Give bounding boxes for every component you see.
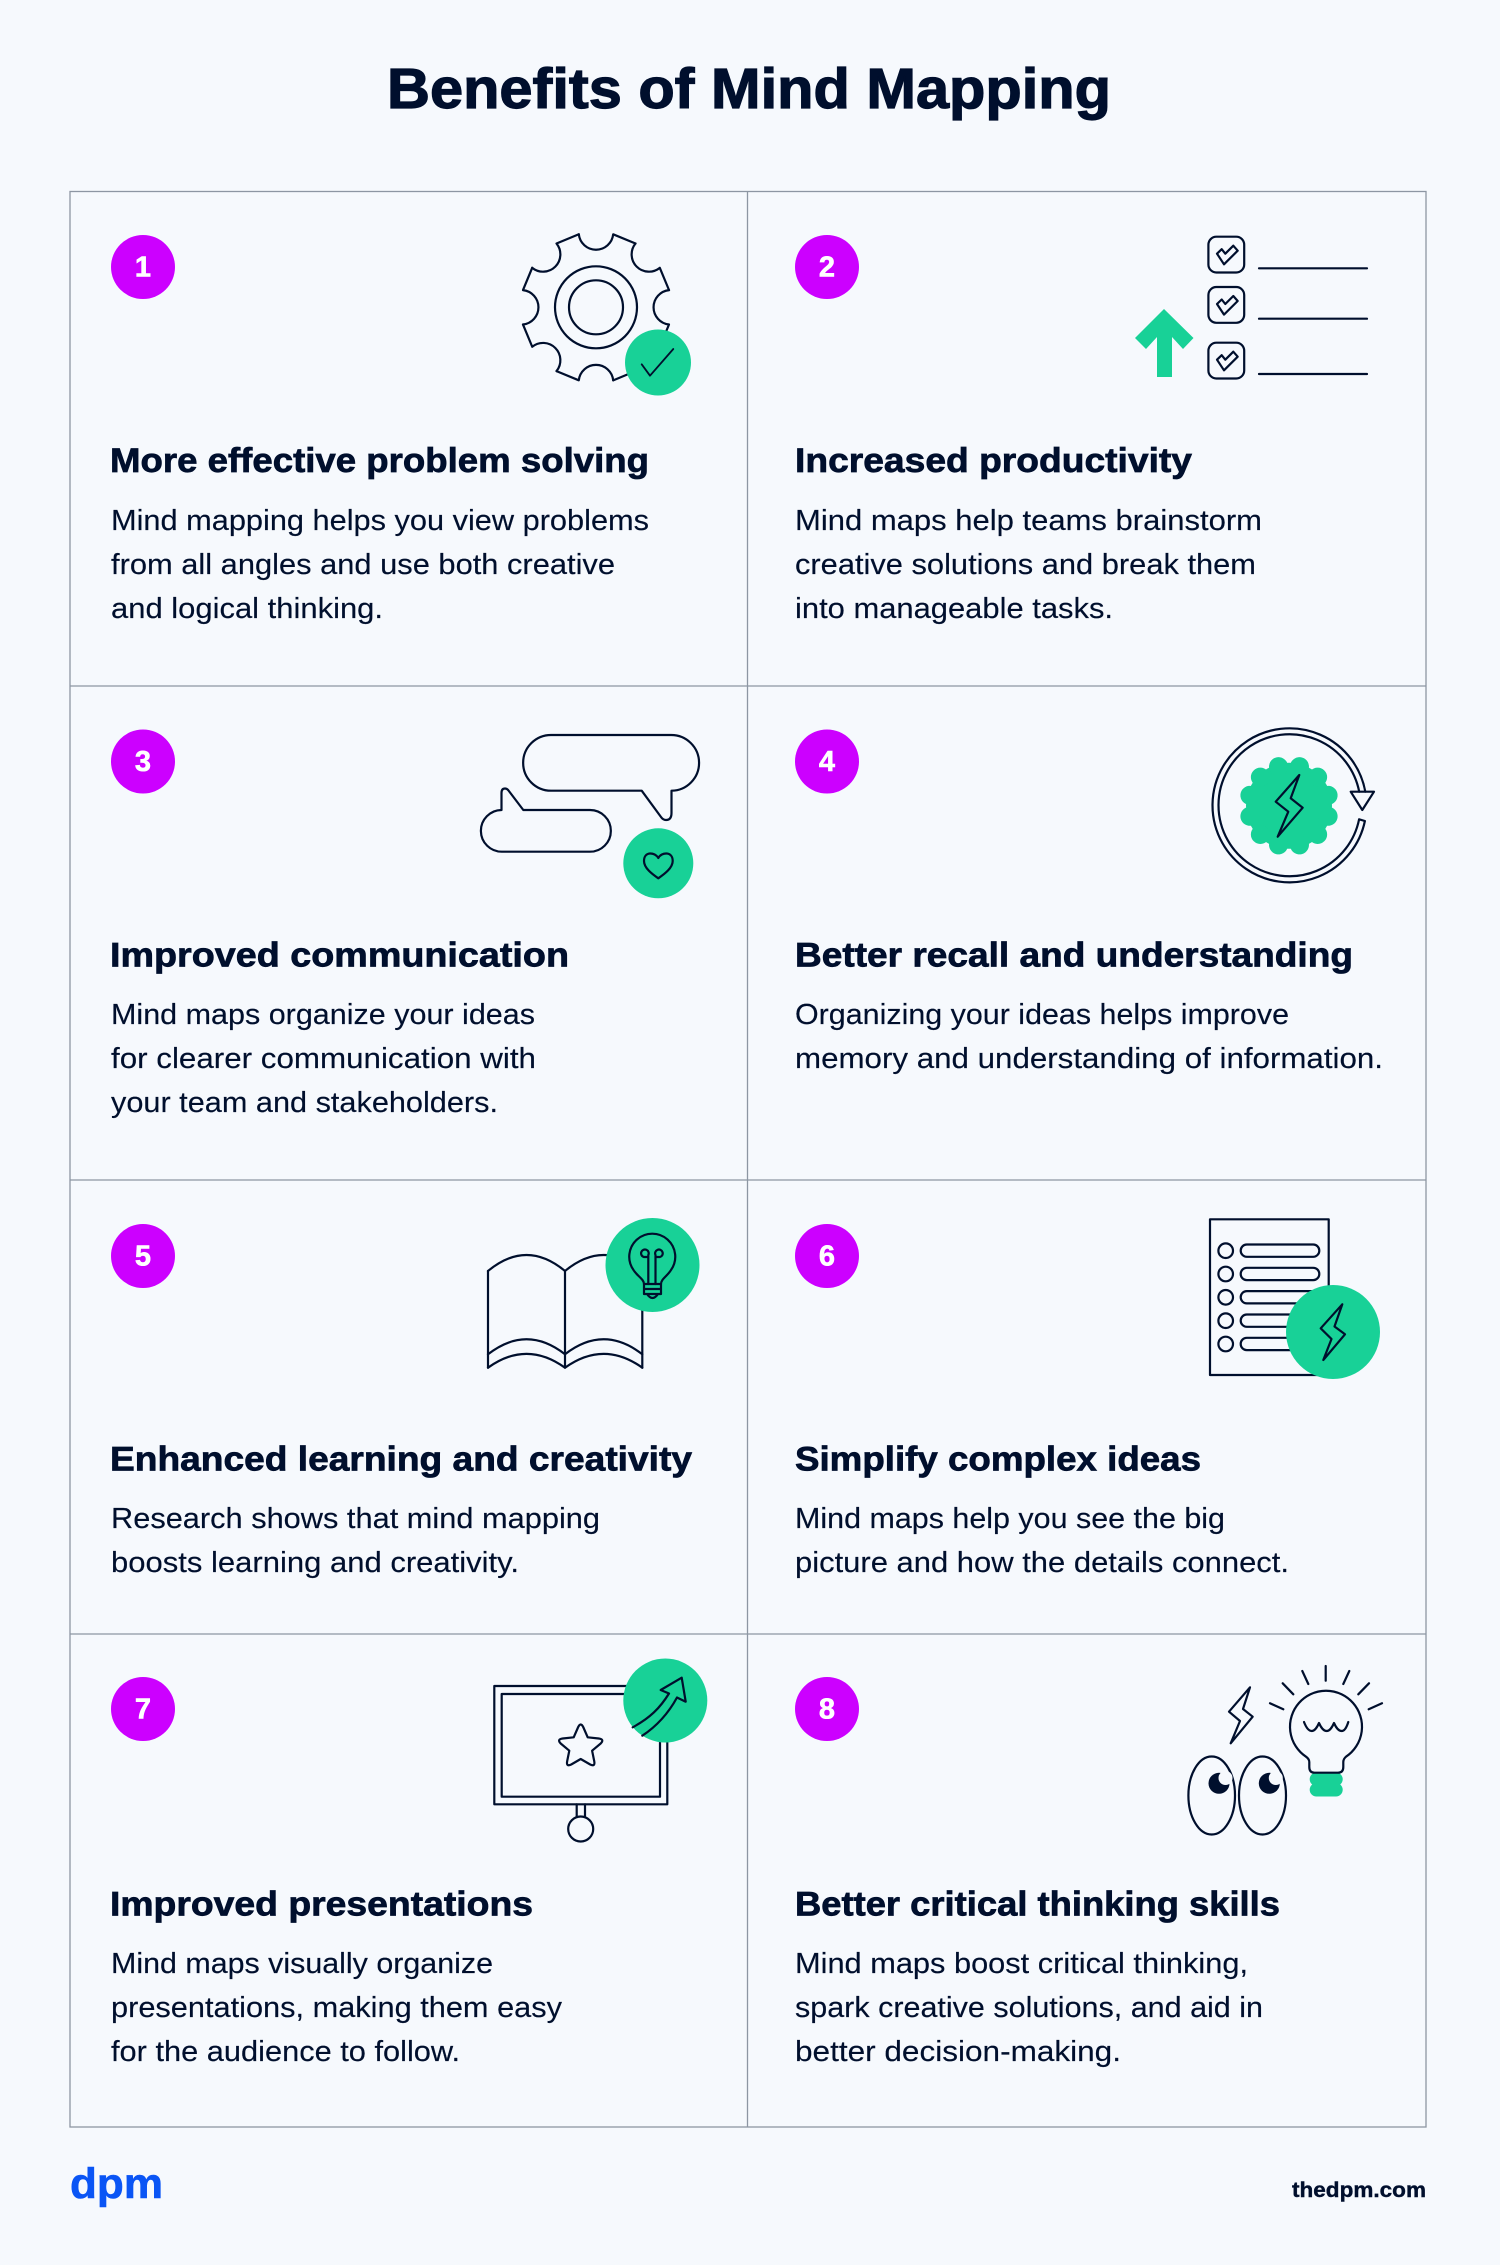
- body text: memory and understanding of information.: [795, 1043, 1383, 1075]
- number badge 7: [111, 1677, 175, 1741]
- body text: [795, 1503, 1289, 1579]
- icon: presentation screen with star and arrow: [494, 1658, 707, 1842]
- icon: open book with light bulb: [488, 1218, 700, 1368]
- body text: picture and how the details connect.: [795, 1547, 1289, 1579]
- heading: Increased productivity: [795, 442, 1192, 480]
- body text: presentations, making them easy: [111, 1992, 563, 2024]
- panel: card 1 problem solving: [110, 228, 691, 625]
- body text: your team and stakeholders.: [111, 1087, 498, 1119]
- icon: badge with lightning and cycle arrow: [1213, 728, 1374, 882]
- number badge 6: [795, 1224, 859, 1288]
- body text: boosts learning and creativity.: [111, 1547, 519, 1579]
- number badge 1: [111, 235, 175, 299]
- number badge 2: 2: [819, 252, 835, 284]
- icon: checklist with arrow: [1135, 237, 1367, 378]
- panel: card 6 complex ideas: [795, 1219, 1380, 1579]
- heading: Better recall and understanding: [795, 936, 1353, 974]
- number badge 8: [795, 1677, 859, 1741]
- body text: for the audience to follow.: [111, 2036, 460, 2068]
- body text: and logical thinking.: [111, 593, 383, 625]
- number badge 8: 8: [819, 1694, 835, 1726]
- panel: card 8 critical thinking: [795, 1666, 1382, 2068]
- icon: speech bubbles with heart: [481, 735, 699, 898]
- number badge 7: 7: [135, 1694, 151, 1726]
- number badge 3: 3: [135, 746, 151, 778]
- number badge 5: [111, 1224, 175, 1288]
- body text: Mind maps organize your ideas: [111, 999, 535, 1031]
- panel: card 2 productivity: [795, 235, 1367, 625]
- number badge 4: [795, 730, 859, 794]
- body text: Mind maps help you see the big: [795, 1503, 1225, 1535]
- icon: gear with check: [516, 228, 691, 396]
- body text: for clearer communication with: [111, 1043, 536, 1075]
- number badge 1: 1: [135, 252, 151, 284]
- body text: [795, 1948, 1263, 2068]
- body text: [111, 1948, 563, 2068]
- icon: document list with lightning: [1210, 1219, 1380, 1379]
- body text: [795, 505, 1262, 625]
- number badge 4: 4: [819, 746, 835, 778]
- heading: Improved communication: [110, 936, 569, 974]
- title: Benefits of Mind Mapping: [387, 57, 1111, 121]
- number badge 2: [795, 235, 859, 299]
- body text: into manageable tasks.: [795, 593, 1113, 625]
- icon: eyes, lightning and light bulb: [1188, 1666, 1382, 1834]
- body text: [795, 999, 1383, 1075]
- panel: card 4 recall: [795, 728, 1383, 1075]
- body text: Mind maps visually organize: [111, 1948, 493, 1980]
- heading: Enhanced learning and creativity: [110, 1441, 692, 1479]
- panel: card 5 learning: [110, 1218, 700, 1579]
- body text: [111, 505, 649, 625]
- logo: dpm: dpm: [70, 2160, 163, 2208]
- heading: Improved presentations: [110, 1886, 533, 1924]
- heading: Simplify complex ideas: [795, 1441, 1201, 1479]
- panel: card 7 presentations: [110, 1658, 707, 2068]
- heading: Better critical thinking skills: [795, 1886, 1280, 1924]
- grid frame: [70, 192, 1426, 2127]
- body text: Research shows that mind mapping: [111, 1503, 600, 1535]
- body text: Mind mapping helps you view problems: [111, 505, 649, 537]
- number badge 3: [111, 730, 175, 794]
- body text: creative solutions and break them: [795, 549, 1256, 581]
- heading: More effective problem solving: [110, 442, 649, 480]
- number badge 6: 6: [819, 1241, 835, 1273]
- body text: [111, 1503, 600, 1579]
- body text: Mind maps help teams brainstorm: [795, 505, 1262, 537]
- number badge 5: 5: [135, 1241, 151, 1273]
- body text: Organizing your ideas helps improve: [795, 999, 1289, 1031]
- body text: Mind maps boost critical thinking,: [795, 1948, 1248, 1980]
- body text: better decision-making.: [795, 2036, 1121, 2068]
- body text: from all angles and use both creative: [111, 549, 615, 581]
- body text: [111, 999, 536, 1119]
- footer url: thedpm.com: [1292, 2179, 1426, 2202]
- body text: spark creative solutions, and aid in: [795, 1992, 1263, 2024]
- panel: card 3 communication: [110, 730, 699, 1119]
